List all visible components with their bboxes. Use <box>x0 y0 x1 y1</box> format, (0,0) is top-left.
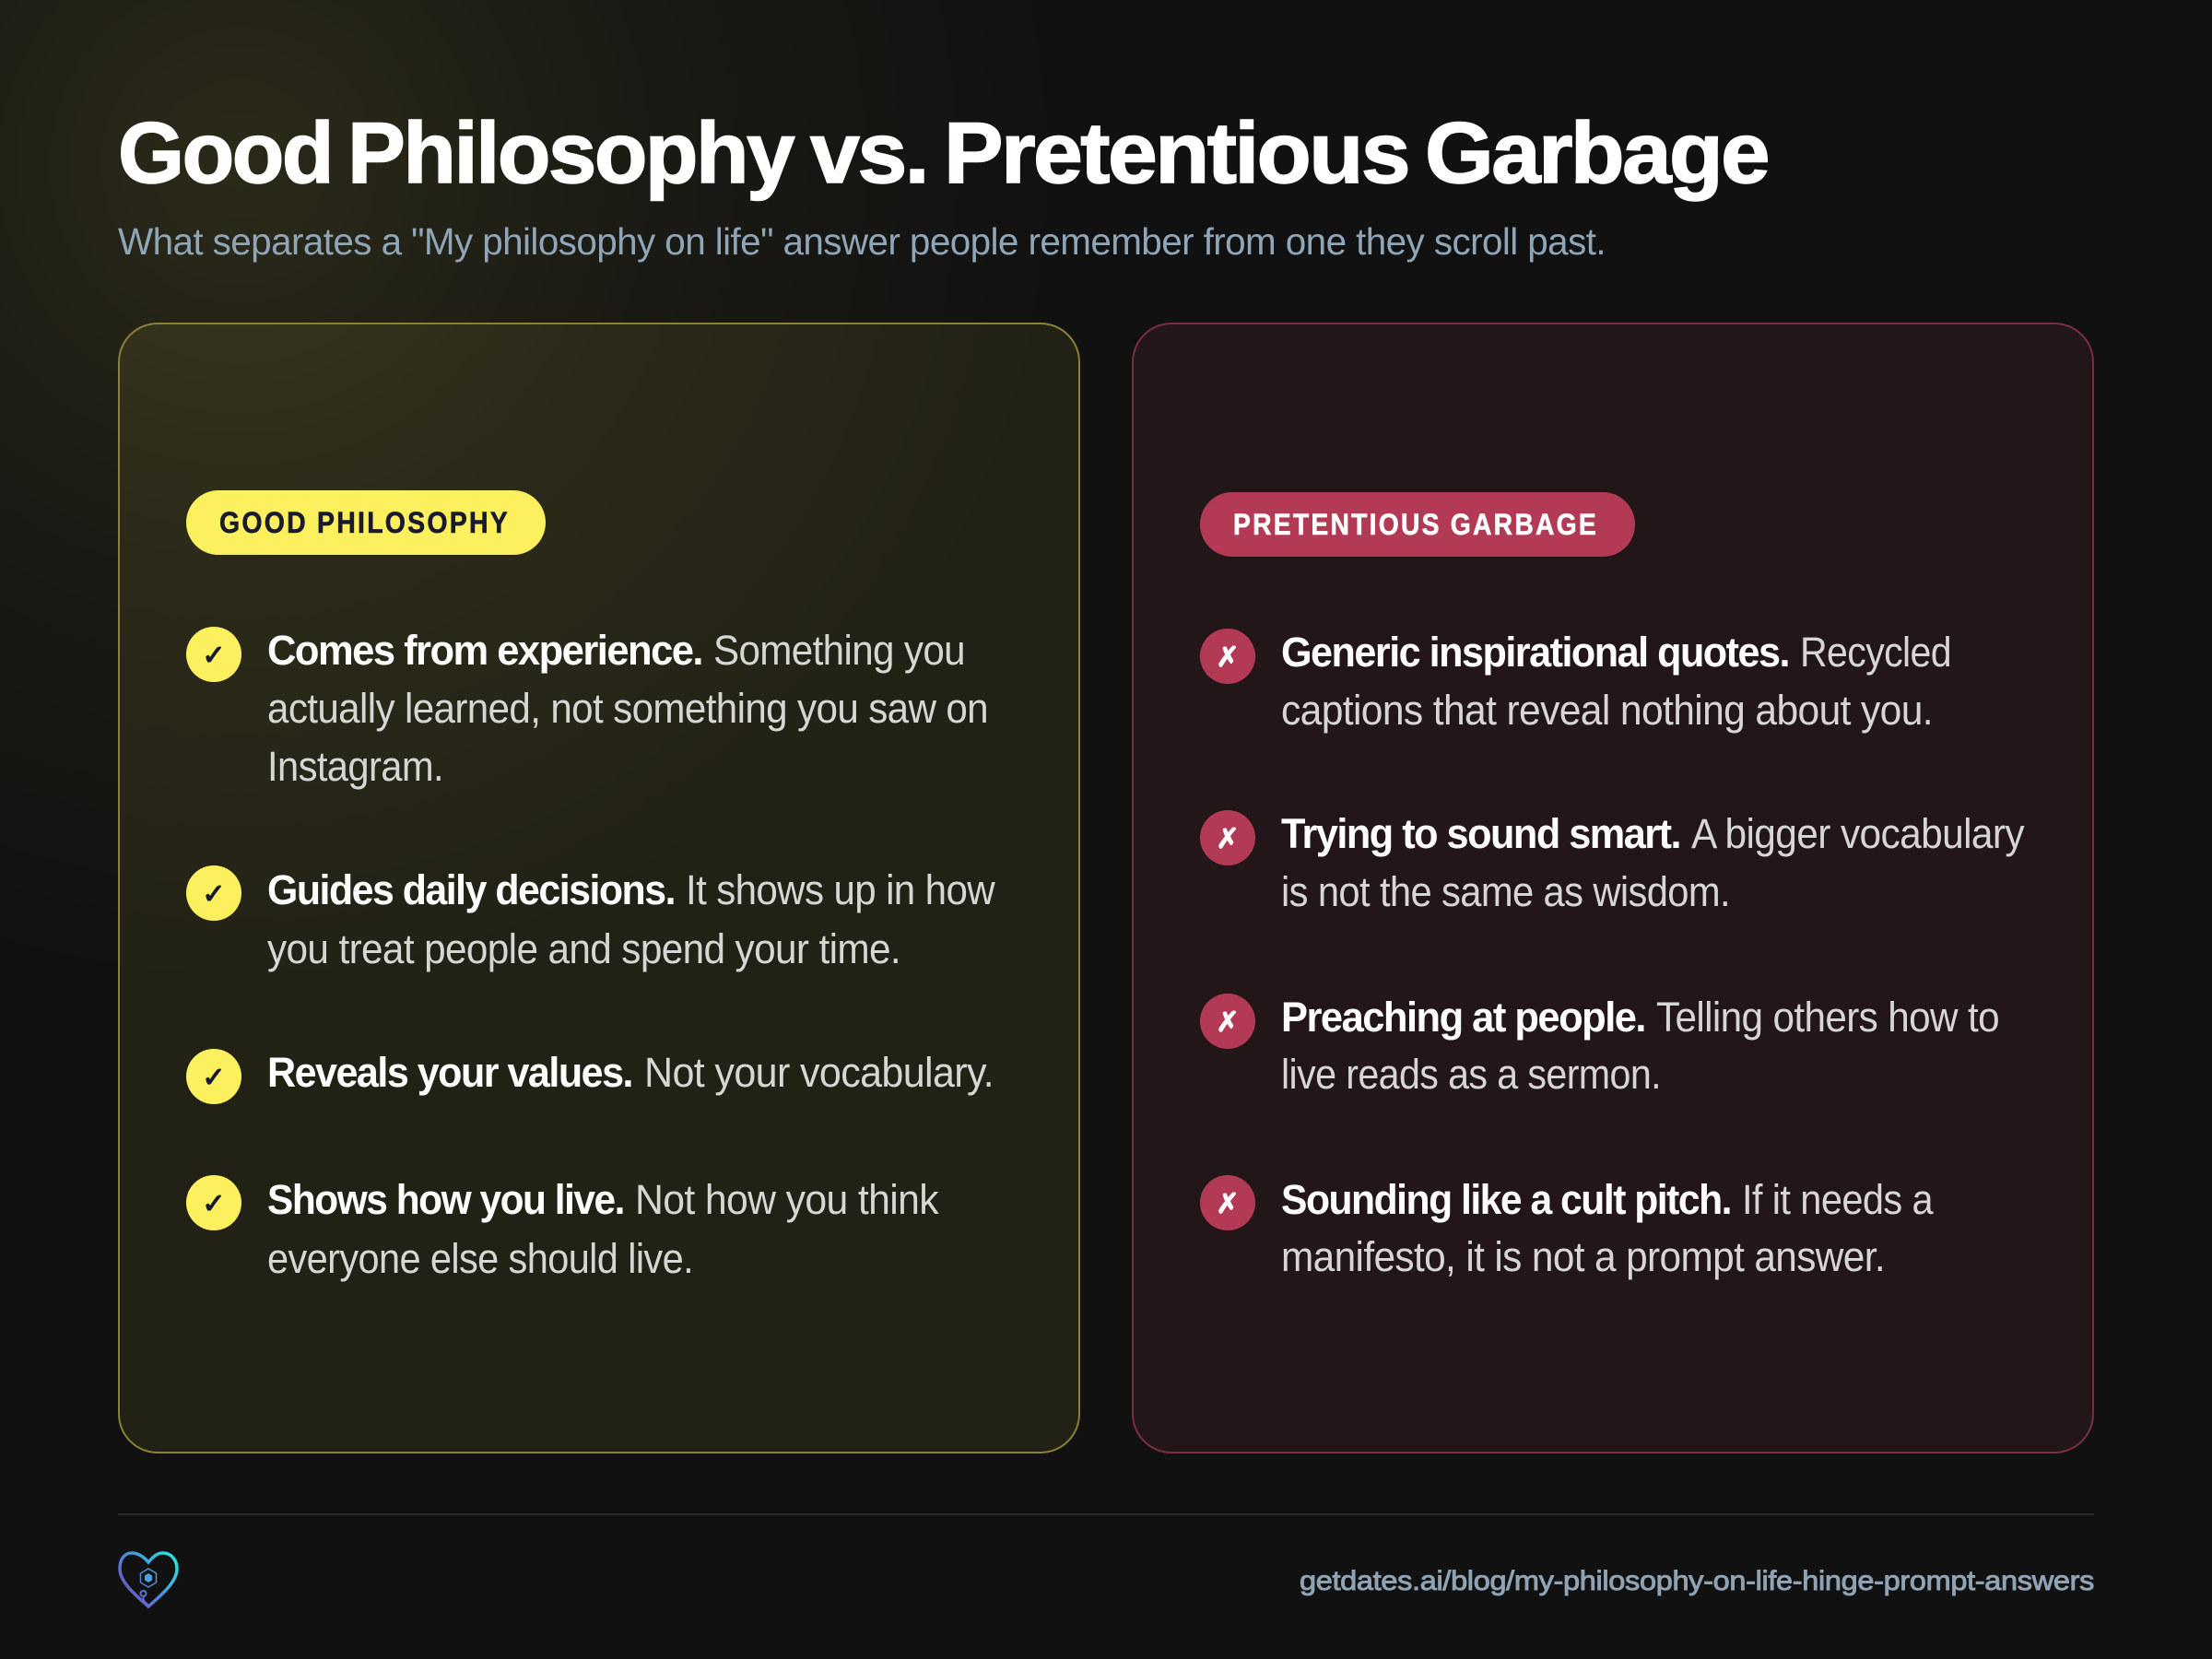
icon: check: ✓ <box>202 878 226 911</box>
item: preaching at people: live reads as a sermon. <box>1281 1051 1661 1098</box>
item: guides daily decisions: Guides daily decisions. <box>267 866 675 913</box>
icon: cross: ✗ <box>1216 641 1240 674</box>
title: Philosophy <box>347 104 794 201</box>
item: preaching at people <box>1200 994 1999 1098</box>
icon: check <box>186 627 241 682</box>
icon: cross <box>1200 629 1255 684</box>
item: reveals your values: Reveals your values. <box>267 1049 632 1096</box>
item: generic inspirational quotes: captions that reveal nothing about you. <box>1281 687 1933 734</box>
badge: good philosophy <box>186 490 546 555</box>
footer url: getdates.ai/blog/my-philosophy-on-life-hinge-prompt-answers <box>1300 1566 2094 1596</box>
item: trying to sound smart <box>1200 810 2025 915</box>
panel: good philosophy <box>119 324 1079 1453</box>
item: shows how you live: Not how you think <box>635 1176 939 1223</box>
item: comes from experience: Comes from experience. <box>267 627 702 674</box>
badge: good philosophy: GOOD PHILOSOPHY <box>219 506 510 539</box>
icon: cross: ✗ <box>1216 823 1240 855</box>
item: trying to sound smart: Trying to sound smart. <box>1281 810 1680 857</box>
title: vs. <box>810 104 927 201</box>
item: guides daily decisions: you treat people and spend your time. <box>267 925 900 972</box>
badge: pretentious garbage <box>1200 492 1635 557</box>
icon: check <box>186 1049 241 1104</box>
icon: check: ✓ <box>202 1188 226 1220</box>
item: trying to sound smart: A bigger vocabulary <box>1691 810 2025 857</box>
icon: cross <box>1200 1175 1255 1230</box>
title: Pretentious <box>944 104 1408 201</box>
item: sounding like a cult pitch: manifesto, it is not a prompt answer. <box>1281 1233 1885 1280</box>
subtitle: What separates a "My philosophy on life" answer people remember from one they scroll past. <box>118 220 1606 263</box>
item: preaching at people: Telling others how to <box>1656 994 1999 1041</box>
item: guides daily decisions: It shows up in how <box>686 866 995 913</box>
item: sounding like a cult pitch: If it needs a <box>1742 1176 1935 1223</box>
item: comes from experience: Something you <box>713 627 965 674</box>
item: reveals your values: Not your vocabulary. <box>644 1049 994 1096</box>
item: comes from experience: Instagram. <box>267 743 443 790</box>
icon: heart logo <box>120 1553 177 1606</box>
icon: cross: ✗ <box>1216 1188 1240 1220</box>
icon: cross: ✗ <box>1216 1006 1240 1039</box>
title <box>118 104 1768 201</box>
badge: pretentious garbage: PRETENTIOUS GARBAGE <box>1233 508 1598 541</box>
item: reveals your values <box>186 1049 994 1104</box>
item: trying to sound smart: is not the same as wisdom. <box>1281 868 1730 915</box>
item: sounding like a cult pitch: Sounding like a cult pitch. <box>1281 1176 1731 1223</box>
icon: cross <box>1200 994 1255 1049</box>
icon: check: ✓ <box>202 640 226 672</box>
item: comes from experience <box>186 627 988 790</box>
item: generic inspirational quotes: Recycled <box>1800 629 1951 676</box>
item: generic inspirational quotes: Generic inspirational quotes. <box>1281 629 1789 676</box>
item: comes from experience: actually learned, not something you saw on <box>267 685 988 732</box>
title: Good <box>118 104 332 201</box>
item: preaching at people: Preaching at people. <box>1281 994 1645 1041</box>
item: sounding like a cult pitch <box>1200 1175 1935 1280</box>
item: shows how you live: Shows how you live. <box>267 1176 624 1223</box>
item: shows how you live <box>186 1175 939 1282</box>
title: Garbage <box>1425 104 1768 201</box>
icon: check <box>186 865 241 921</box>
item: generic inspirational quotes <box>1200 629 1951 734</box>
item: guides daily decisions <box>186 865 995 972</box>
icon: cross <box>1200 810 1255 865</box>
item: shows how you live: everyone else should live. <box>267 1235 693 1282</box>
icon: check: ✓ <box>202 1062 226 1094</box>
icon: check <box>186 1175 241 1230</box>
panel: pretentious garbage <box>1133 324 2093 1453</box>
